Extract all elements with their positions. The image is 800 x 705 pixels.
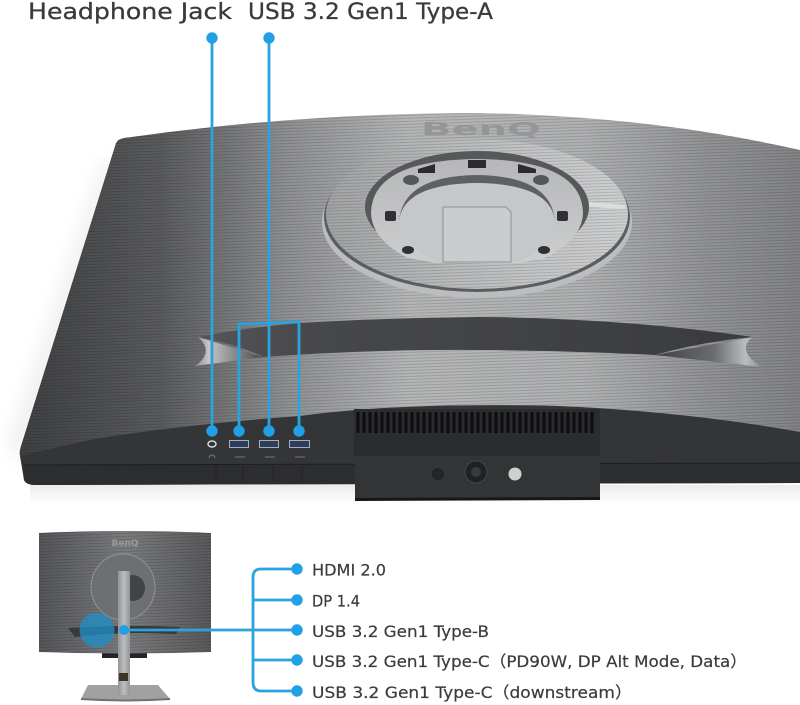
item: USB Type-B: USB 3.2 Gen1 Type-B [312, 622, 489, 641]
item: USB Type-C PD90W: USB 3.2 Gen1 Type-C（PD90W, DP Alt Mode, Data） [312, 652, 747, 671]
small groove [68, 626, 180, 637]
item: DP 1.4: DP 1.4 [312, 592, 360, 610]
port list [291, 560, 747, 702]
callout dot: USB port 2 [263, 425, 275, 437]
neck connector [102, 650, 147, 658]
small highlight circle [80, 612, 114, 648]
callout dot: USB port 3 [293, 425, 305, 437]
BenQ logo: BenQ [421, 119, 541, 140]
small stand pole [118, 571, 130, 695]
heading: USB 3.2 Gen1 Type-A: USB 3.2 Gen1 Type-A [248, 0, 493, 25]
small monitor body [39, 531, 211, 654]
item: USB Type-C downstream: USB 3.2 Gen1 Type-C（downstream） [312, 683, 632, 702]
item: HDMI 2.0: HDMI 2.0 [312, 560, 386, 580]
ports [208, 440, 310, 458]
heading: Headphone Jack: Headphone Jack [28, 0, 232, 25]
mount ring [322, 139, 632, 298]
small monitor rear view [39, 531, 211, 702]
monitor back shell [20, 113, 800, 456]
source dot [119, 625, 129, 635]
monitor bezel [20, 385, 800, 485]
stand bracket [355, 456, 600, 501]
monitor rear close-up [10, 113, 800, 505]
soft shadows [10, 160, 118, 465]
stand base [81, 685, 170, 700]
item: DP 1.4 [291, 592, 360, 610]
handle groove [195, 317, 762, 367]
callout dot: USB label [263, 32, 275, 44]
callout lines: top ports [206, 32, 305, 437]
ventilation slots [354, 409, 600, 456]
callout dot: USB port 1 [233, 425, 245, 437]
small logo: BenQ [111, 539, 139, 549]
callout dot: headphone jack [206, 425, 218, 437]
small mount ring [91, 554, 155, 620]
connector bracket lines [125, 569, 297, 691]
callout dot: headphone label [206, 32, 218, 44]
